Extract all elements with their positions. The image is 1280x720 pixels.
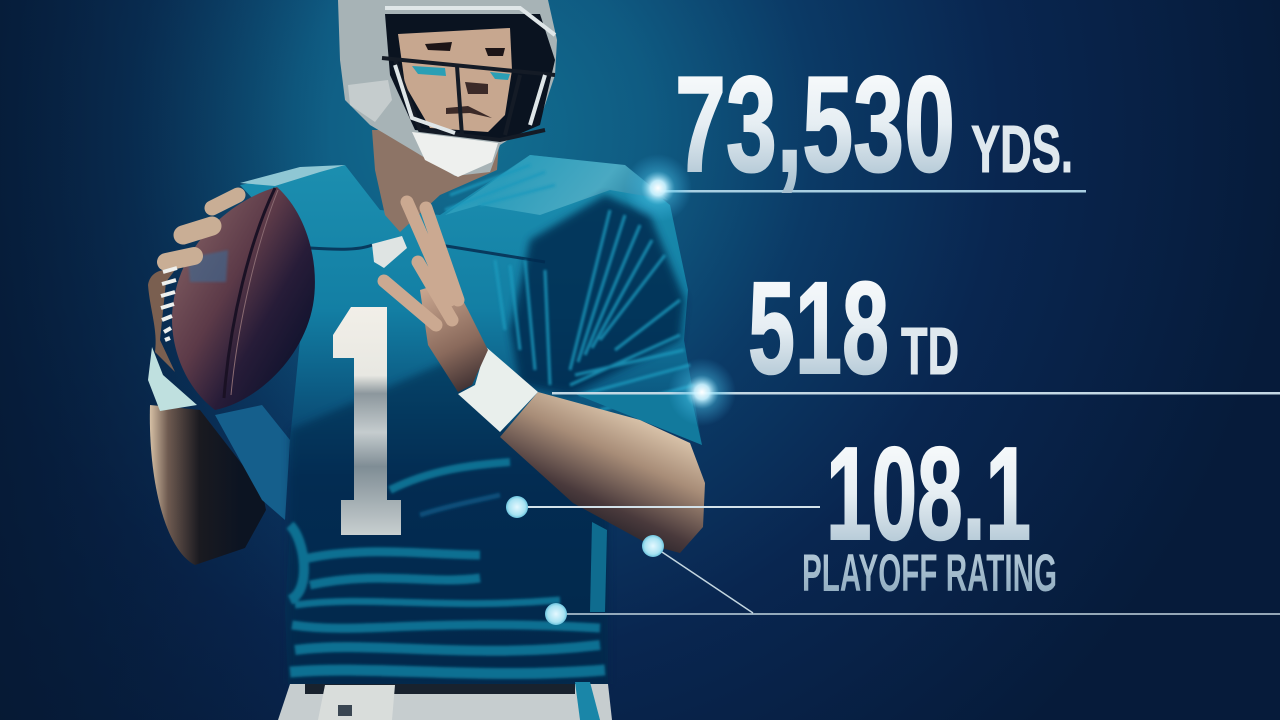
leader line <box>552 392 1280 394</box>
nose and mouth <box>446 82 492 118</box>
laces <box>161 268 177 340</box>
fingers and thumb <box>384 202 458 325</box>
open hand <box>384 202 488 392</box>
neck <box>372 130 500 232</box>
tab mark <box>338 705 352 716</box>
face <box>398 28 512 132</box>
value: 108.1 <box>826 420 1031 567</box>
player illustration <box>148 0 705 720</box>
unit: YDS. <box>971 112 1073 187</box>
sleeve shadow <box>510 195 685 395</box>
eyes <box>425 42 505 56</box>
left wrist band <box>148 347 197 411</box>
stat: passing yards <box>624 48 1086 222</box>
football <box>172 187 315 410</box>
hand edge <box>148 270 175 372</box>
belt tab <box>318 685 395 720</box>
value: 73,530 <box>675 48 955 200</box>
helmet <box>338 0 557 177</box>
unit: TD <box>901 314 959 389</box>
stat: touchdowns <box>552 254 1280 426</box>
value: 518 <box>748 254 889 401</box>
face mask <box>382 58 555 140</box>
ball logo <box>188 250 228 282</box>
shoulder highlight right <box>445 155 668 215</box>
glow node <box>668 358 736 426</box>
leader line <box>660 190 1086 192</box>
torso shadow <box>288 360 608 684</box>
palm <box>420 280 488 392</box>
shoulder highlight left <box>240 165 345 186</box>
chest seam <box>310 245 545 262</box>
pants belt <box>305 684 575 694</box>
glow node <box>624 154 692 222</box>
torso waist folds <box>290 462 605 674</box>
wrist band <box>458 347 538 432</box>
connector lines with dots <box>506 496 1280 625</box>
sleeve cuff highlight <box>570 392 702 445</box>
forearm <box>500 392 705 553</box>
pants stripe <box>575 682 600 720</box>
side panel stripe <box>590 522 607 612</box>
ball seam light <box>231 190 278 395</box>
pants <box>278 684 612 720</box>
gripping fingers <box>166 195 238 262</box>
number 1 <box>333 307 401 535</box>
eye black <box>412 66 510 80</box>
label: PLAYOFF RATING <box>802 544 1057 603</box>
helmet dark padding <box>385 14 555 140</box>
sleeve behind ball <box>215 405 290 520</box>
collar badge <box>372 236 407 268</box>
stat: playoff rating <box>802 420 1057 603</box>
mask light bars <box>385 8 555 133</box>
sleeve and chest folds <box>445 165 695 410</box>
chin strap <box>412 132 498 177</box>
helmet shell <box>338 0 557 176</box>
ball seam <box>224 188 275 398</box>
jersey torso and shoulders <box>240 155 702 684</box>
football group <box>148 187 315 411</box>
rear arm <box>150 405 266 565</box>
ear guard <box>348 80 392 122</box>
